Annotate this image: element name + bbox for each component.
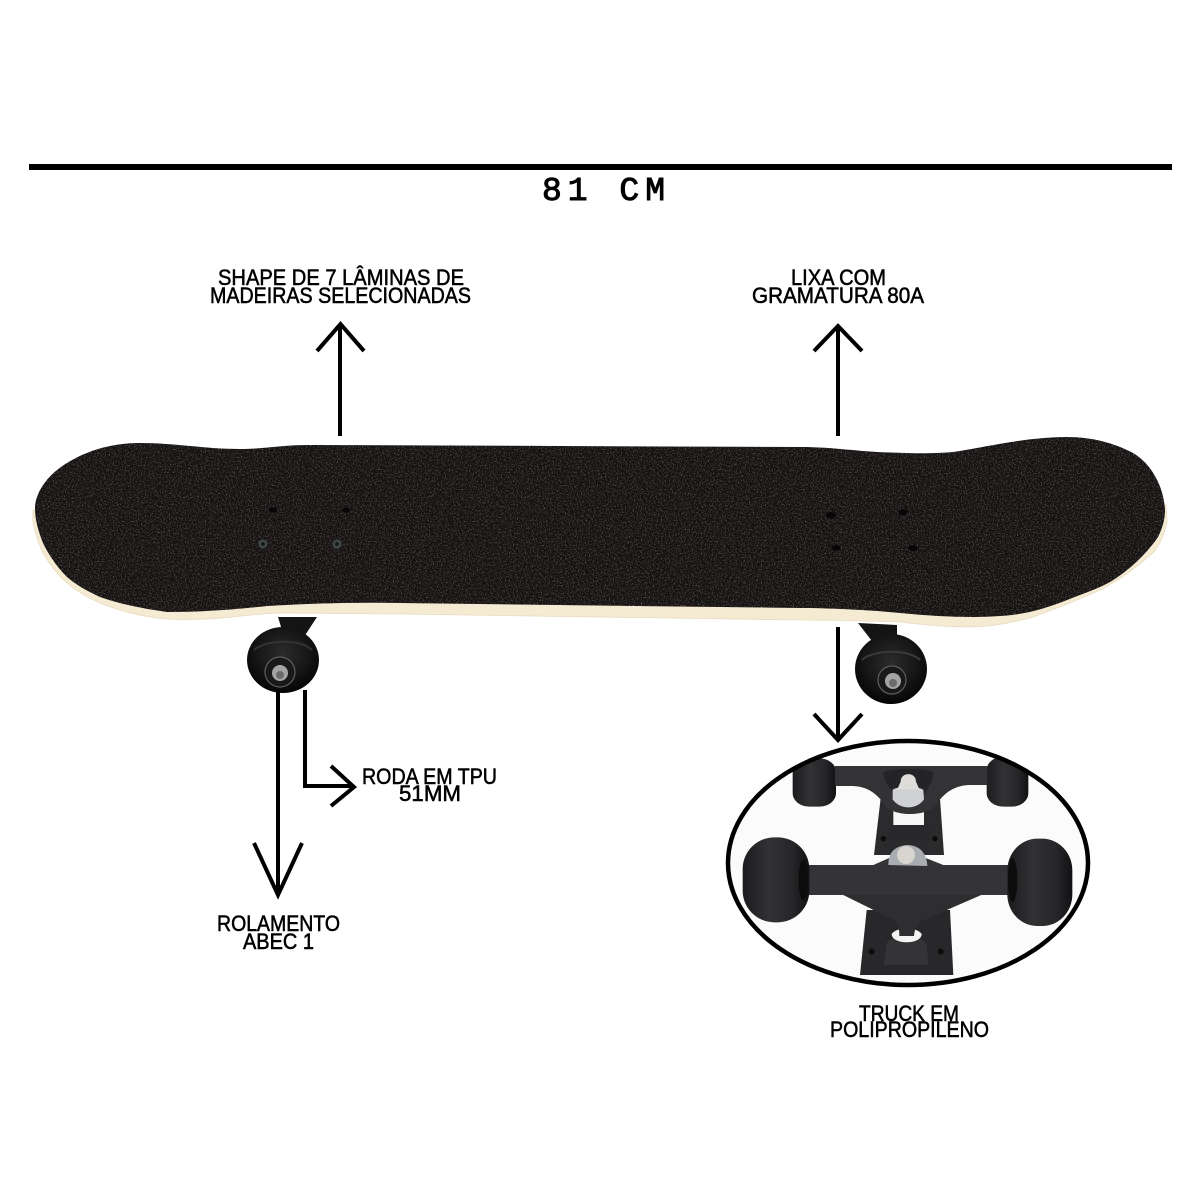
left wheel and truck xyxy=(247,617,319,693)
label: grip tape: GRAMATURA 80A xyxy=(752,283,924,308)
label: grip tape: LIXA COM xyxy=(791,265,886,290)
truck bolts, left xyxy=(258,508,350,548)
label: truck xyxy=(830,1001,989,1042)
label: bearing: ROLAMENTO xyxy=(217,911,340,936)
arrow: up to shape label xyxy=(317,324,364,436)
label: shape: MADEIRAS SELECIONADAS xyxy=(210,283,471,308)
right wheel and truck xyxy=(855,623,927,704)
rear truck xyxy=(793,757,1028,855)
label: bearing xyxy=(217,911,340,954)
dimension bar xyxy=(29,164,1172,170)
deck wood edge xyxy=(33,505,1167,627)
truck bolts, right xyxy=(826,509,918,551)
arrow: down to bearing label xyxy=(254,690,302,895)
label: wheel xyxy=(362,764,497,806)
arrow: down to truck detail xyxy=(814,627,862,740)
label: truck: POLIPROPILENO xyxy=(830,1017,989,1042)
label: shape xyxy=(210,265,471,308)
arrow: up to grip label xyxy=(814,326,862,436)
truck detail oval xyxy=(720,735,1100,990)
label: wheel: 51MM xyxy=(399,781,461,806)
dimension label: 81 CM: 81 CM xyxy=(542,173,665,210)
label: shape: SHAPE DE 7 LÂMINAS DE xyxy=(218,265,464,290)
label: bearing: ABEC 1 xyxy=(243,929,314,954)
label: truck: TRUCK EM xyxy=(859,1001,959,1026)
front truck xyxy=(743,837,1072,975)
arrow: right to wheel label xyxy=(305,690,354,806)
label: grip tape xyxy=(752,265,924,308)
deck grip tape xyxy=(30,430,1170,625)
label: wheel: RODA EM TPU xyxy=(362,764,497,789)
skateboard deck xyxy=(30,430,1170,627)
